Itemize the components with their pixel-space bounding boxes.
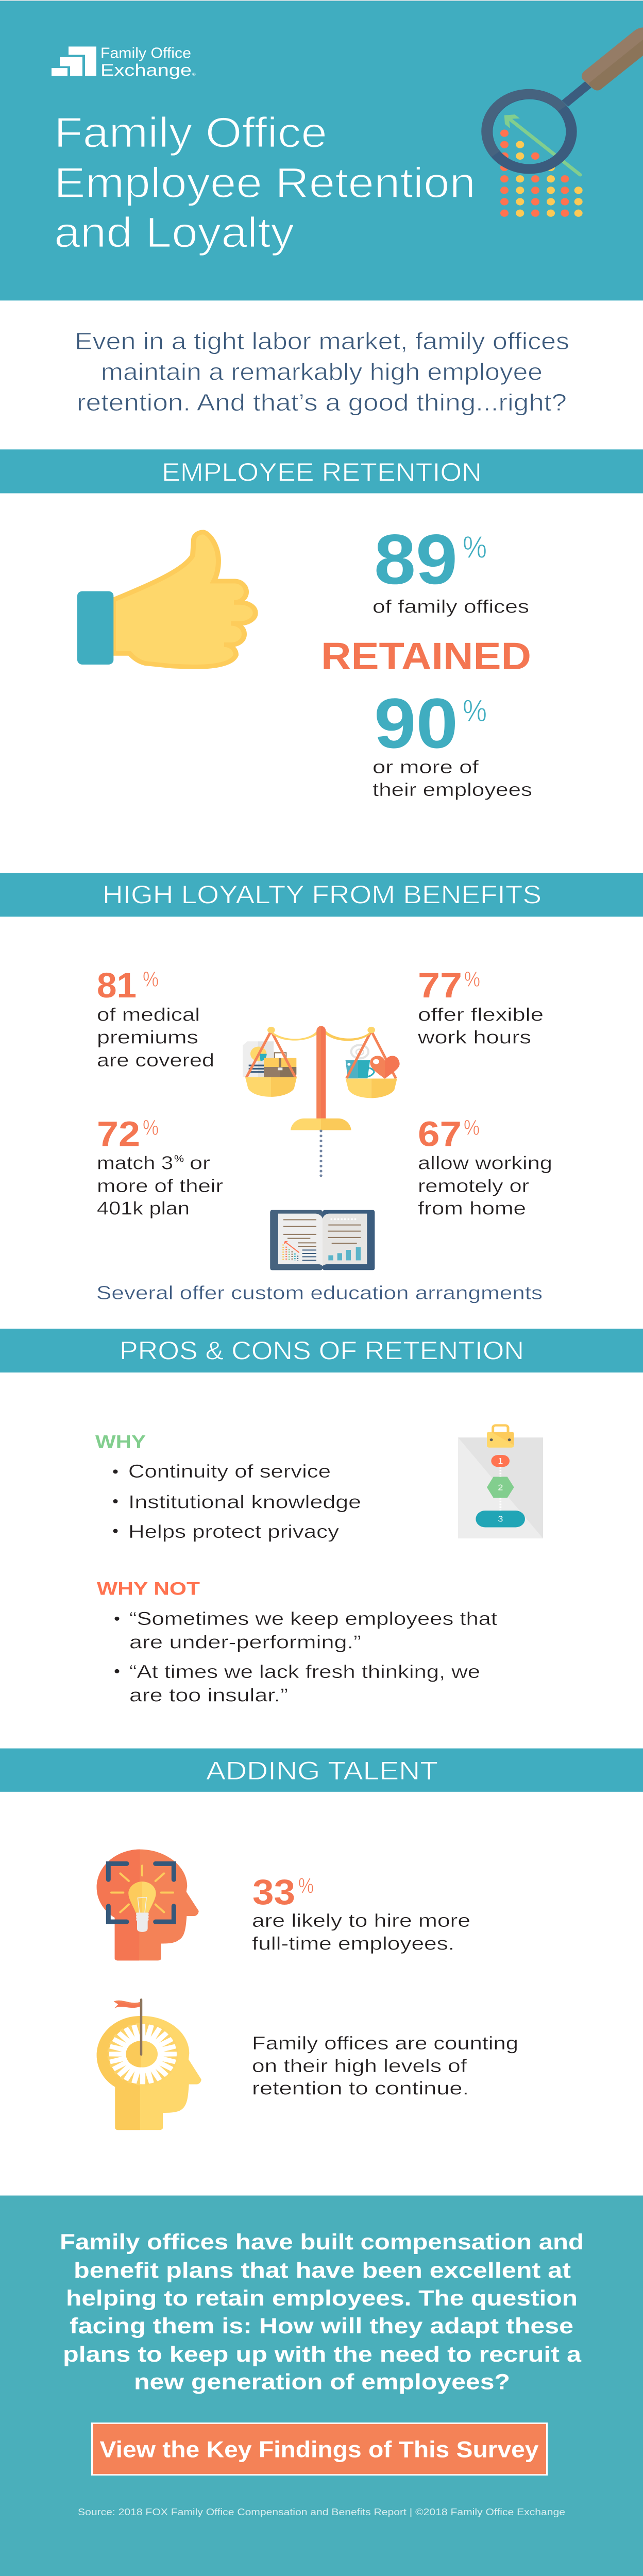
stat: 72%: match 3 [97,1153,173,1174]
title: Family Office [54,108,327,156]
stat: 90% or more of their employees: their employees [373,779,532,801]
stat: 81%: % [143,968,159,991]
stat: 90% or more of their employees: 90 [374,684,458,763]
icon: numbered clipboard [458,1426,543,1538]
list: why not: “At times we lack fresh thinking, we [129,1662,480,1683]
section heading: employee retention: EMPLOYEE RETENTION [162,458,482,487]
stat: 72%: 401k plan [97,1198,190,1219]
list: why: Helps protect privacy [128,1521,340,1542]
text: counting on retention: on their high levels of [252,2056,467,2077]
intro text: maintain a remarkably high employee [101,359,543,385]
stat: 67%: 67 [418,1114,462,1154]
conclusion text: plans to keep up with the need to recruit a [63,2342,582,2367]
text: counting on retention: Family offices are counting [252,2033,518,2054]
stat: 67%: from home [418,1198,526,1219]
stat: 77% [417,966,544,1048]
logo: Family Office Exchange [52,45,196,80]
stat: 89% of family offices [373,520,529,617]
list: why not [97,1579,497,1706]
stat: 72%: more of their [97,1176,223,1196]
stat: 81%: of medical [97,1004,200,1025]
icon: numbered clipboard: 1 [498,1456,503,1466]
stat: 33% likely to hire: 33 [252,1873,295,1912]
icon: balance scale [243,1026,400,1130]
icon: magnifying glass over dot chart [487,27,643,217]
panel: header [0,0,643,300]
intro text: retention. And that’s a good thing...right? [77,390,567,416]
stat: 77%: work hours [417,1027,531,1048]
icon: open book [270,1210,375,1270]
stat: 77%: 77 [418,966,462,1005]
left pan items: document and briefcase [243,1041,296,1077]
stat: 67%: remotely or [418,1176,529,1196]
icon: head with light bulb [97,1850,199,1960]
logo: Family Office Exchange: ® [192,72,196,77]
stat: 81% [97,966,214,1071]
conclusion text: facing them is: How will they adapt these [70,2314,573,2338]
stat: 67%: % [464,1116,480,1140]
stat: 89% of family offices: % [463,530,487,565]
stat: 33% likely to hire: are likely to hire more [252,1910,470,1931]
list: why: WHY [95,1432,146,1452]
logo: Family Office Exchange: Exchange [100,61,192,80]
text: counting on retention [252,2033,518,2099]
stat: 89% of family offices: of family offices [373,597,529,617]
text: counting on retention: retention to continue. [252,2078,469,2099]
conclusion text: Family offices have built compensation and [60,2230,584,2255]
section heading: adding talent: ADDING TALENT [206,1757,438,1785]
section heading: high loyalty from benefits [0,873,643,917]
stat: 72% [97,1114,223,1219]
stat: 72%: 72 [97,1114,140,1154]
section heading: adding talent [0,1749,643,1792]
stat: 72%: % [143,1116,159,1140]
stat: 77%: % [464,968,480,991]
panel: footer [0,2196,643,2576]
stat: 81%: premiums [97,1027,198,1048]
stat: 67%: allow working [418,1153,552,1174]
button: view the key findings [92,2423,547,2475]
list: why [95,1432,361,1542]
conclusion text: helping to retain employees. The question [66,2286,578,2311]
conclusion text: benefit plans that have been excellent at [74,2258,571,2282]
section heading: high loyalty from benefits: HIGH LOYALTY FROM BENEFITS [103,880,542,909]
section heading: pros and cons [0,1329,643,1372]
title: Employee Retention [54,159,476,207]
list: why: Institutional knowledge [128,1492,361,1513]
stat: 90% or more of their employees: or more of [373,757,479,777]
callout: retained: RETAINED [321,634,531,677]
stat: 81%: 81 [97,966,137,1005]
section heading: employee retention [0,449,643,493]
right pan items: mug and heart [346,1045,374,1078]
stat: 81%: are covered [97,1050,214,1071]
stat: 72%: or [190,1153,210,1174]
logo: Family Office Exchange: Family Office [100,45,191,61]
conclusion text [60,2230,584,2394]
caption: custom education: Several offer custom education arrangments [96,1282,543,1304]
intro text: Even in a tight labor market, family offices [75,329,569,355]
stat: 67% [418,1114,552,1219]
stat: 90% or more of their employees [373,684,532,801]
stat: 33% likely to hire: % [298,1874,314,1898]
stat: 90% or more of their employees: % [463,693,487,728]
list: why: Continuity of service [128,1461,331,1482]
icon: thumbs up [77,532,256,667]
stat: 33% likely to hire: full-time employees. [252,1934,454,1954]
stat: 89% of family offices: 89 [374,520,458,599]
conclusion text: new generation of employees? [134,2369,510,2394]
connector: dotted line from scale to book [319,1129,323,1177]
icon: head with flag and sun [97,1999,201,2130]
intro text [75,329,569,416]
list: why not: WHY NOT [97,1579,200,1599]
button: view the key findings: View the Key Findings of This Survey [99,2437,539,2463]
title [54,108,476,256]
list: why not: “Sometimes we keep employees that [129,1608,497,1630]
list: why not: are under-performing.” [129,1632,361,1653]
stat: 72%: % [174,1153,184,1164]
source line: Source: 2018 FOX Family Office Compensation and Benefits Report | ©2018 Family Office Exchange [78,2507,565,2518]
icon: numbered clipboard: 3 [498,1514,503,1523]
title: and Loyalty [54,209,294,256]
section heading: pros and cons: PROS & CONS OF RETENTION [120,1336,524,1365]
list: why not: are too insular.” [129,1685,288,1706]
icon: numbered clipboard: 2 [498,1483,503,1492]
stat: 77%: offer flexible [418,1004,544,1025]
stat: 33% likely to hire [252,1873,470,1954]
